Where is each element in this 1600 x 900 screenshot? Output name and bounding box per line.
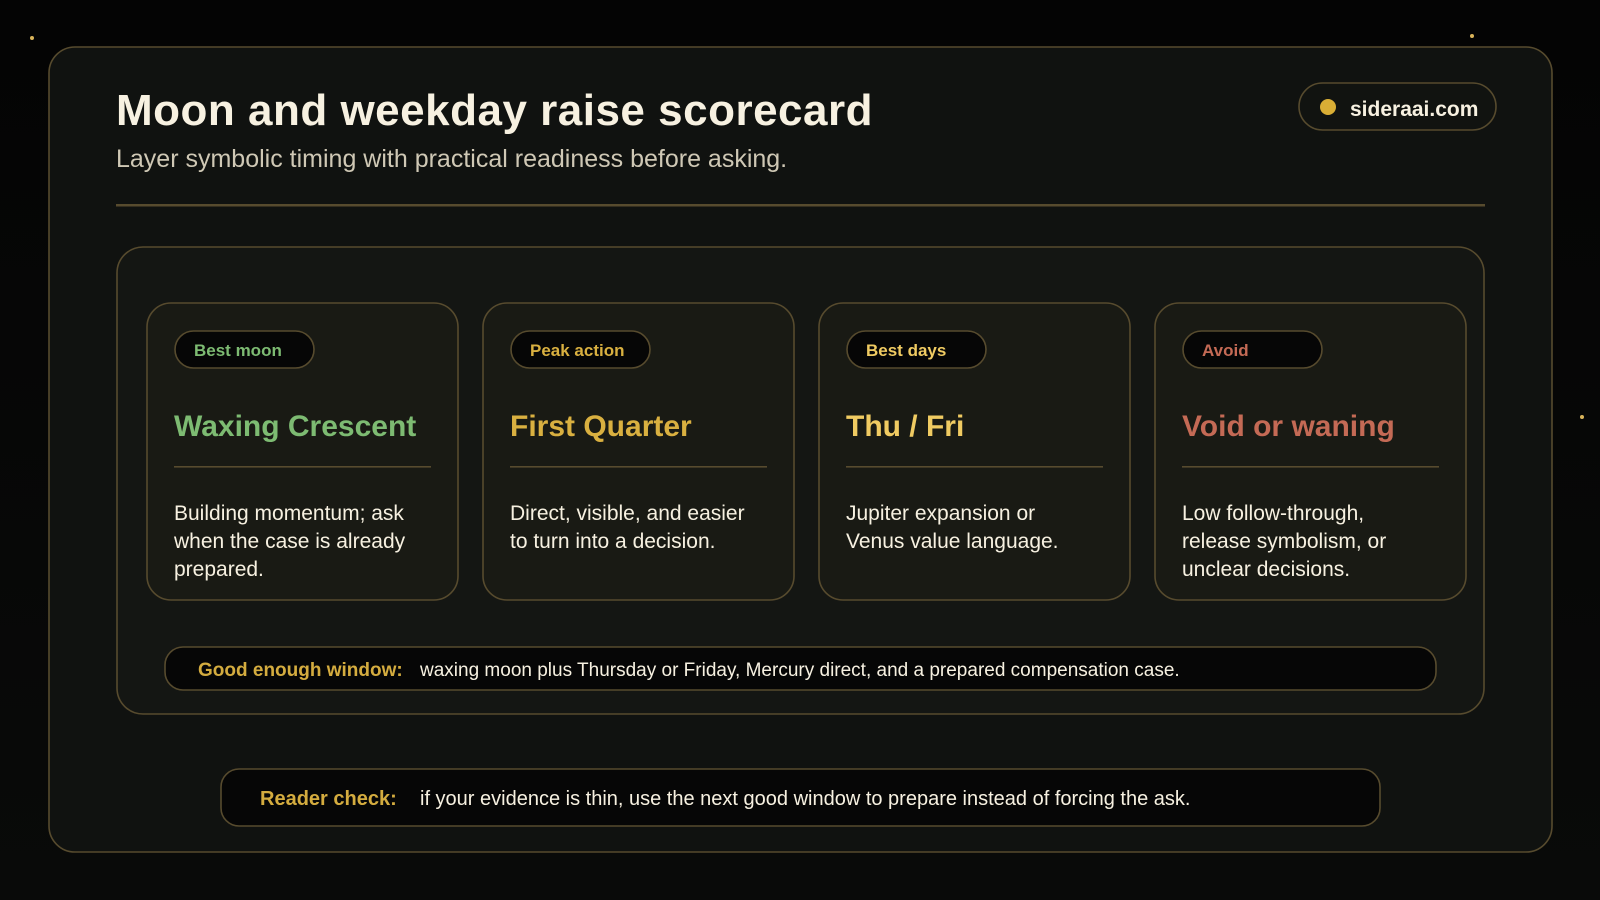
callout: good enough window: waxing moon plus Thursday or Friday, Mercury direct, and a prepared compensation case. (419, 660, 1180, 681)
text: avoid detail: release symbolism, or (1182, 530, 1386, 553)
panel: scorecard (117, 247, 1484, 714)
callout: reader check (221, 769, 1380, 826)
callout: reader check: Reader check: (260, 788, 397, 810)
badge: peak action: Peak action (530, 341, 624, 360)
heading: first quarter: First Quarter (510, 410, 692, 443)
badge: peak action (511, 331, 650, 368)
card: avoid (1155, 303, 1466, 600)
text: best days detail: Jupiter expansion or (846, 502, 1035, 525)
card: best moon (147, 303, 458, 600)
text: best moon detail: Building momentum; ask (174, 502, 404, 525)
callout: good enough window (165, 647, 1436, 690)
callout: reader check: if your evidence is thin, use the next good window to prepare instead of forcing the ask. (420, 788, 1190, 810)
subtitle: Layer symbolic timing with practical readiness before asking. (116, 145, 787, 173)
callout: good enough window: Good enough window: (198, 660, 403, 681)
heading: thu fri: Thu / Fri (846, 410, 964, 443)
badge: best days: Best days (866, 341, 946, 360)
brand badge (1299, 83, 1496, 130)
heading: void or waning: Void or waning (1182, 410, 1395, 443)
heading: waxing crescent: Waxing Crescent (174, 410, 416, 443)
text: peak action detail: Direct, visible, and easier (510, 502, 745, 525)
text: avoid detail: Low follow-through, (1182, 502, 1364, 525)
text: best days detail: Venus value language. (846, 530, 1059, 553)
text: peak action detail: to turn into a decision. (510, 530, 715, 553)
brand name: sideraai.com (1350, 98, 1478, 121)
badge: best moon (175, 331, 314, 368)
badge: best moon: Best moon (194, 341, 282, 360)
card: peak action (483, 303, 794, 600)
icon: brand dot (1320, 99, 1336, 115)
badge: avoid (1183, 331, 1322, 368)
title: Moon and weekday raise scorecard (116, 86, 873, 135)
card: best days (819, 303, 1130, 600)
text: best moon detail: when the case is already (173, 530, 406, 553)
text: avoid detail: unclear decisions. (1182, 558, 1350, 581)
badge: best days (847, 331, 986, 368)
text: best moon detail: prepared. (174, 558, 264, 581)
badge: avoid: Avoid (1202, 341, 1249, 360)
